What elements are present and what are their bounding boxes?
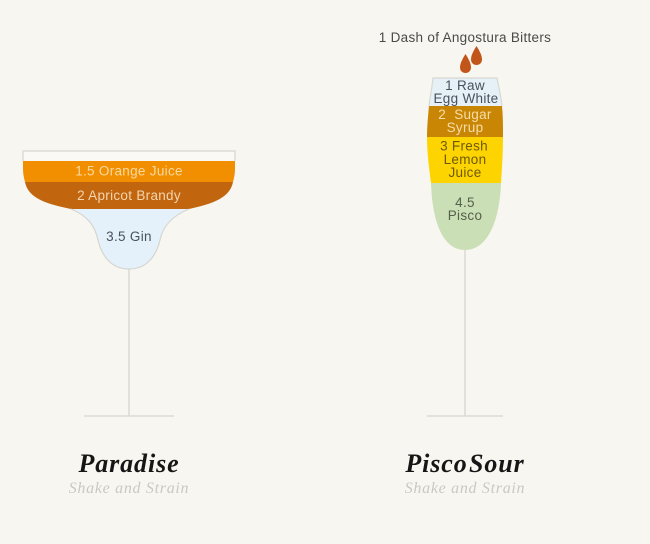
label: sugar syrup: 2 Sugar xyxy=(438,107,492,122)
glass stem and base xyxy=(427,250,503,416)
label: gin: 3.5 Gin xyxy=(106,229,152,244)
layer: sugar syrup xyxy=(427,106,503,137)
method: shake and strain: Shake and Strain xyxy=(69,480,189,497)
cocktail: Pisco Sour xyxy=(379,30,551,497)
label: apricot brandy: 2 Apricot Brandy xyxy=(77,188,181,203)
label: bitters: 1 Dash of Angostura Bitters xyxy=(379,30,551,45)
label: lemon juice: Lemon xyxy=(444,152,486,167)
label: lemon juice: 3 Fresh xyxy=(440,138,488,154)
layer: pisco xyxy=(431,183,501,250)
layer: orange juice xyxy=(23,161,235,182)
label: egg white: 1 Raw xyxy=(445,78,485,93)
label: pisco: 4.5 xyxy=(455,195,475,210)
layer: egg white xyxy=(429,78,502,106)
layer: apricot brandy xyxy=(25,182,233,209)
label: egg white: Egg White xyxy=(434,91,498,106)
glass rim outline xyxy=(23,151,235,161)
label: sugar syrup: Syrup xyxy=(447,120,483,135)
layer: lemon juice xyxy=(427,137,503,183)
glass bowl outline xyxy=(71,209,189,269)
label: orange juice: 1.5 Orange Juice xyxy=(75,164,183,178)
label: pisco: Pisco xyxy=(448,208,482,223)
icon: bitters drops xyxy=(460,46,482,73)
name: Paradise: Paradise xyxy=(77,449,180,478)
cocktail: Paradise xyxy=(23,151,235,497)
name: Pisco Sour: Pisco Sour xyxy=(404,449,525,478)
label: lemon juice: Juice xyxy=(448,165,482,180)
layer: gin xyxy=(71,209,189,269)
glass rim outline xyxy=(429,78,502,106)
method: shake and strain: Shake and Strain xyxy=(405,480,525,497)
glass stem and base xyxy=(84,269,174,416)
